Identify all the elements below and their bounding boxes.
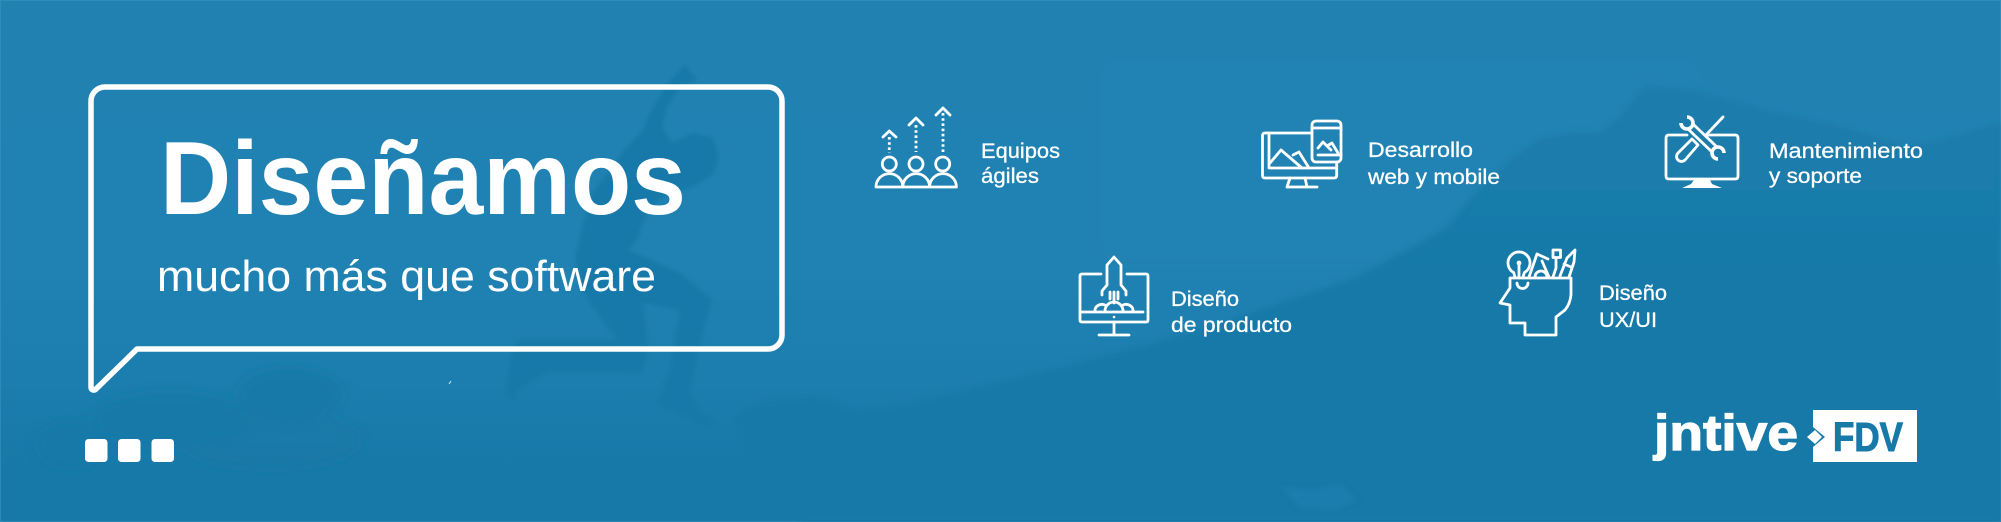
service: equipos ágiles xyxy=(876,108,1060,188)
label: ágiles xyxy=(981,164,1039,188)
three dots xyxy=(85,439,174,462)
label xyxy=(1367,138,1500,189)
label xyxy=(981,139,1060,188)
wordmark: jntive xyxy=(1653,405,1798,461)
label: UX/UI xyxy=(1599,308,1657,332)
light patch near bottom xyxy=(1281,484,1358,510)
subtitle: mucho más que software xyxy=(157,252,656,301)
service: diseño de producto xyxy=(1080,257,1292,337)
label xyxy=(1769,139,1923,188)
service: diseño UX/UI xyxy=(1500,250,1667,335)
icon: people with arrows xyxy=(876,108,956,187)
label: Diseño xyxy=(1599,281,1667,305)
icon: head with tools xyxy=(1500,250,1575,335)
label xyxy=(1599,281,1667,332)
label: Equipos xyxy=(981,139,1060,163)
label: Diseño xyxy=(1171,287,1239,311)
label: web y mobile xyxy=(1367,165,1500,189)
logo: intive FDV xyxy=(1653,405,1917,462)
diamond xyxy=(1807,430,1822,444)
label xyxy=(1171,287,1292,337)
background person silhouette xyxy=(506,65,719,427)
background mountain silhouette xyxy=(733,85,2001,522)
label: Mantenimiento xyxy=(1769,139,1923,163)
background trees silhouette xyxy=(38,369,360,468)
label: Desarrollo xyxy=(1368,138,1473,162)
FDV text: FDV xyxy=(1833,414,1904,460)
icon: monitor with tools xyxy=(1666,117,1738,188)
icon: monitor with rocket xyxy=(1080,257,1148,335)
label: y soporte xyxy=(1769,164,1862,188)
tiny speck xyxy=(449,381,451,384)
service: mantenimiento y soporte xyxy=(1666,117,1923,188)
service: desarrollo web y mobile xyxy=(1262,121,1500,189)
label: de producto xyxy=(1171,313,1292,337)
icon: monitor and phone xyxy=(1262,121,1341,187)
FDV badge xyxy=(1813,410,1917,462)
title: Diseñamos xyxy=(160,121,686,237)
speech bubble xyxy=(91,87,782,390)
